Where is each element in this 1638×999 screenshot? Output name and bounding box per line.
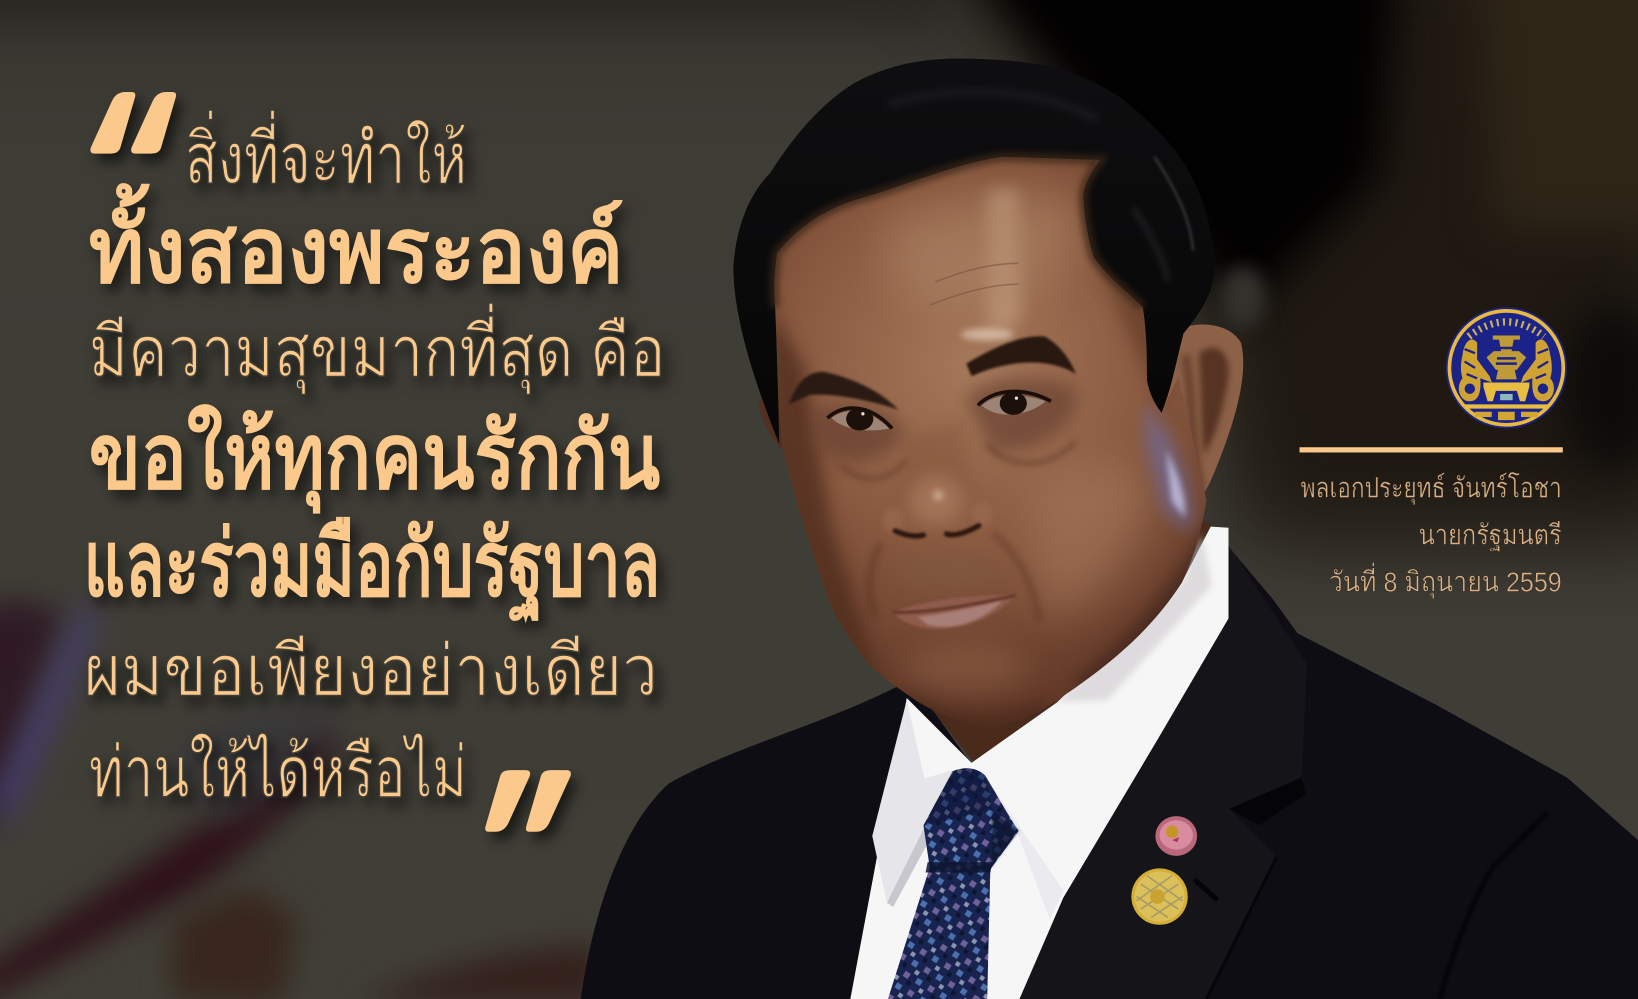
portrait: man in dark suit: [581, 59, 1638, 999]
seal: right lion: [1521, 340, 1554, 401]
shirt and collar: [850, 527, 1228, 999]
nasolabial shading: [870, 543, 881, 617]
forehead wrinkles: [930, 263, 1019, 305]
quote line 1: สิ่งที่จะทำให้: [185, 110, 467, 199]
icon: government seal: [1446, 307, 1567, 428]
left eyebrow: [789, 372, 898, 410]
pin: gold button: [1131, 868, 1188, 925]
hair sheen: [1154, 157, 1193, 251]
attribution text: [1301, 471, 1562, 599]
hairline fuzz: [774, 157, 1143, 307]
suit jacket: [581, 545, 1638, 999]
seal: central vessel: [1487, 335, 1526, 379]
jaw shadow: [1072, 524, 1202, 690]
lapel buttonhole: [1196, 881, 1216, 899]
hair: [733, 59, 1214, 444]
jacket collar and lapel: [1020, 545, 1547, 999]
quote line 2 (bold): ทั้งสองพระองค์: [89, 183, 624, 302]
face: [768, 157, 1222, 742]
cheek highlight: [1031, 462, 1149, 617]
nose shape: [912, 428, 960, 472]
closing quote mark: [485, 770, 571, 832]
quote text block: [84, 92, 665, 832]
attribution name: พลเอกประยุทธ์ จันทร์โอชา: [1301, 471, 1562, 505]
divider line: [1300, 447, 1563, 452]
right eyebrow: [966, 336, 1076, 376]
neck: [898, 522, 1212, 766]
left ear: [759, 388, 783, 449]
quote line 7: ท่านให้ได้หรือไม่: [89, 731, 467, 812]
pin: pink lotus: [1155, 816, 1197, 856]
blue rim light: [1144, 402, 1192, 533]
right eye: [978, 391, 1051, 415]
chin shading: [912, 647, 1020, 694]
seal: flame crown: [1469, 322, 1544, 336]
quote line 3: มีความสุขมากที่สุด คือ: [89, 303, 665, 395]
attribution date: วันที่ 8 มิถุนายน 2559: [1329, 562, 1562, 599]
seal: left lion: [1459, 340, 1492, 401]
forehead highlight: [987, 188, 1022, 332]
facial shading: [768, 157, 1222, 742]
opening quote mark: [90, 92, 176, 154]
right ear: [1149, 324, 1243, 500]
eye sockets: [810, 404, 904, 462]
necktie: [888, 768, 1019, 999]
quote line 4 (bold): ขอให้ทุกคนรักกัน: [89, 404, 660, 514]
mouth: [893, 595, 1015, 629]
attribution title: นายกรัฐมนตรี: [1419, 518, 1562, 551]
left eye: [827, 408, 892, 431]
nostrils: [895, 526, 979, 536]
quote line 5 (bold): และร่วมมือกับรัฐบาล: [84, 514, 660, 625]
quote line 6: ผมขอเพียงอย่างเดียว: [84, 632, 658, 711]
seal: throne base: [1483, 382, 1529, 401]
